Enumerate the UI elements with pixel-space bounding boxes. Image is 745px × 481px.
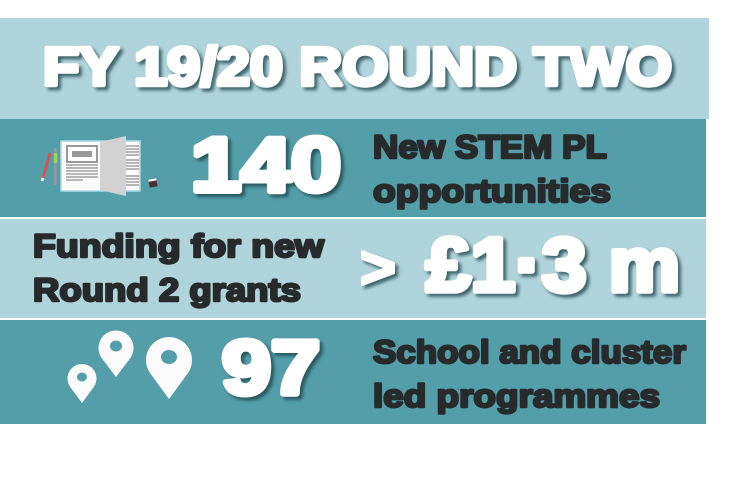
stat: £1.3 m: £1·3 m (426, 223, 680, 308)
title: FY 19/20 ROUND TWO (43, 37, 672, 97)
label: school and cluster led programmes: School and cluster (373, 334, 686, 370)
label: school and cluster led programmes (373, 334, 686, 414)
label: New STEM PL opportunities: New STEM PL (373, 129, 607, 165)
stat: 140: 140 (191, 123, 341, 208)
label: New STEM PL opportunities: opportunities (373, 173, 611, 209)
icon: map pins (68, 330, 192, 403)
panel: school and cluster led programmes (0, 320, 706, 424)
stat: 97: 97 (222, 326, 320, 411)
panel: title band (0, 18, 709, 119)
label: New STEM PL opportunities (373, 129, 611, 209)
icon: open book with pencils (42, 136, 158, 196)
label: funding for new round 2 grants (33, 228, 324, 308)
panel: funding (0, 219, 706, 318)
stat: more than: > (360, 234, 396, 301)
panel: STEM PL opportunities (0, 119, 706, 217)
label: funding for new round 2 grants: Funding for new (33, 228, 324, 264)
label: funding for new round 2 grants: Round 2 grants (33, 272, 301, 308)
label: school and cluster led programmes: led programmes (373, 378, 660, 414)
